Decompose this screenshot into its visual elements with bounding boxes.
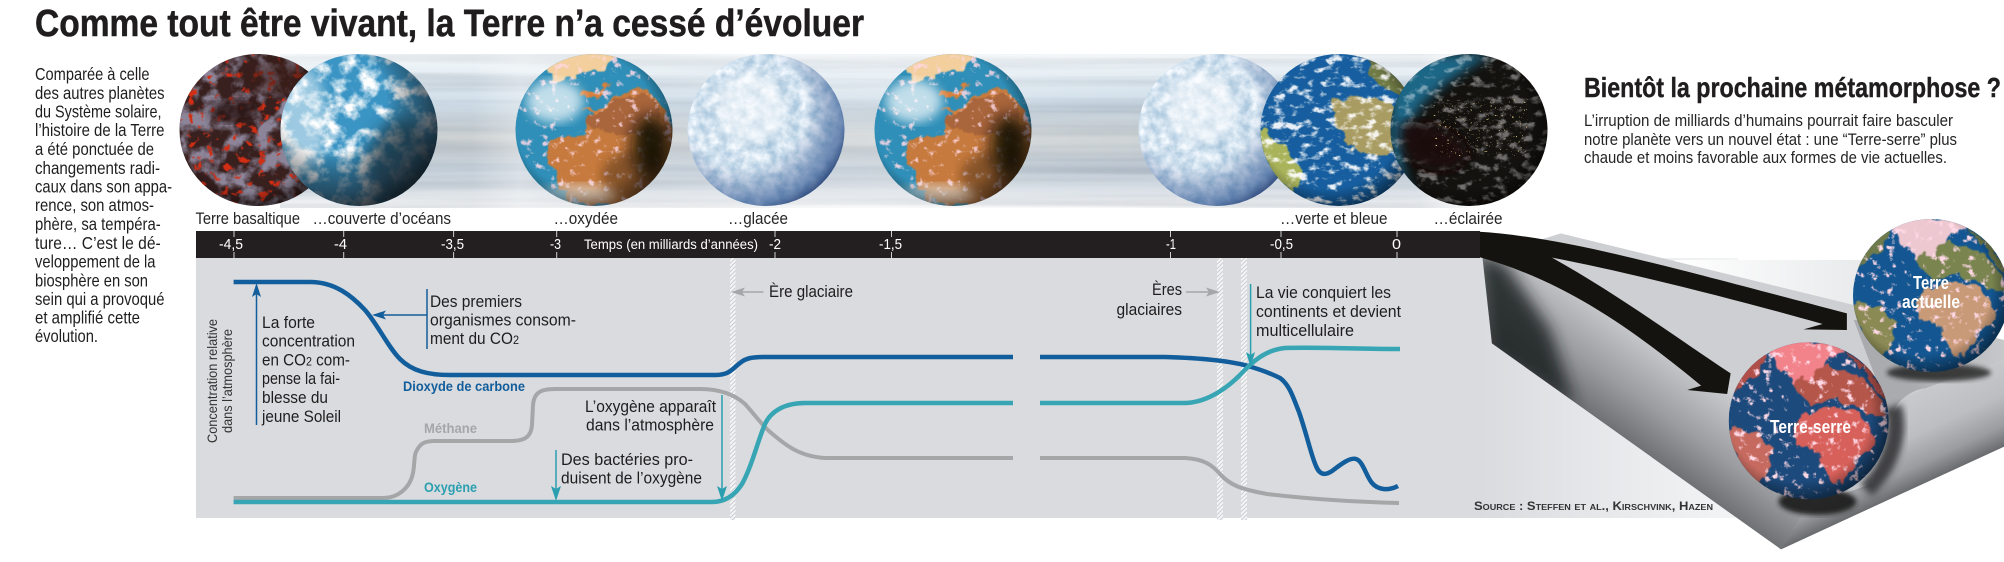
arrows: two possible trajectories [1477,232,1847,394]
title: Comme tout être vivant, la Terre n’a cessé d’évoluer [35,3,864,45]
annotation: Ères glaciaires with arrow: glaciaires [1116,300,1182,319]
y axis label [204,319,235,443]
axis tick labels: -0,5 [1270,236,1293,253]
label: Terre actuelle [1902,273,1960,312]
glacial period stripes [730,258,1247,520]
source note: Source : Steffen et al., Kirschvink, Hazen [1474,501,1713,513]
label: glacée: …glacée [728,209,788,228]
panel: blurred planet band [280,54,1480,208]
text block: introduction [35,64,172,346]
label: éclairée: …éclairée [1434,209,1502,228]
label: Dioxyde de carbone: Dioxyde de carbone [403,379,525,394]
annotation: young Sun with arrow: jeune Soleil [261,407,341,426]
text block: next metamorphosis: chaude et moins favorable aux formes de vie actuelles. [1584,148,1947,167]
panel: pale backdrop behind the stability diagram [1675,260,1885,330]
text block: introduction: des autres planètes [35,83,165,103]
y axis label: Concentration relative [204,319,220,443]
annotation: bacteria with arrow: Des bactéries pro- [561,450,693,469]
icon: planet frozen [688,54,844,206]
label: Oxygène: Oxygène [424,480,477,495]
icon: planet basaltic Earth [180,54,308,206]
text block: introduction: du Système solaire, [35,102,162,122]
label: Méthane: Méthane [424,421,477,436]
annotation: Ères glaciaires with arrow: Ères [1152,280,1182,299]
annotation: Ère glaciaire with arrow: Ère glaciaire [769,282,853,301]
annotation: multicellular life with arrow: continents et devient [1256,302,1401,321]
icon: planet covered with oceans [279,54,438,210]
panel: chart background extension [1480,258,1738,518]
icon: planet oxidized [516,50,676,206]
annotation: oxygen appears with arrow [585,395,727,501]
annotation: young Sun with arrow: pense la fai- [262,369,340,388]
label: Terre actuelle: actuelle [1902,292,1960,312]
text block: introduction: Comparée à celle [35,64,150,84]
icon: planet oxidized second phase [874,50,1035,206]
annotation: first organisms with arrow: ment du CO2 [430,329,519,348]
annotation: oxygen appears with arrow: L’oxygène apparaît [585,397,716,416]
icon: planet frozen second phase [1138,54,1278,206]
icon: planet lit by cities [1390,54,1548,206]
annotation: first organisms with arrow: organismes consom- [430,310,576,330]
text block: introduction: veloppement de la [35,252,156,272]
annotation: young Sun with arrow: en CO2 com- [262,350,350,370]
axis tick labels: -1,5 [879,236,902,253]
time axis bar [196,231,1480,258]
axis tick labels: -2 [769,236,781,253]
axis tick labels: -1 [1166,236,1176,253]
annotation: young Sun with arrow: La forte [262,313,315,332]
label: Terre-serre: Terre-serre [1770,417,1851,437]
text block: next metamorphosis: notre planète vers un nouvel état : une “Terre-serre” plus [1584,130,1957,149]
text block: introduction: sein qui a provoqué [35,289,164,309]
text block: introduction: l’histoire de la Terre [35,120,164,140]
annotation: first organisms with arrow: Des premiers [430,292,522,311]
annotation: Ères glaciaires with arrow [1116,280,1220,319]
annotation: multicellular life with arrow [1246,283,1401,367]
text block: next metamorphosis: L’irruption de milliards d’humains pourrait faire basculer [1584,111,1953,130]
annotation: young Sun with arrow [252,283,355,426]
line chart: carbon dioxide [234,282,1398,489]
axis tick labels: -4 [334,236,347,253]
panel: chart background [196,258,1480,518]
y axis label: dans l’atmosphère [219,329,235,433]
icon: planet green and blue [1260,54,1404,206]
annotation: young Sun with arrow: concentration [262,332,355,350]
annotation: multicellular life with arrow: multicellulaire [1256,321,1354,340]
icon: globe Terre actuelle [1853,217,2004,372]
label: Terre basaltique: Terre basaltique [196,209,300,228]
label: oxydée: …oxydée [554,209,618,228]
text block: introduction: a été ponctuée de [35,139,154,159]
text block: introduction: phère, sa tempéra- [35,214,161,234]
axis tick labels: -4,5 [219,236,243,253]
axis title: Temps (en milliards d’années) [584,237,758,252]
text block: introduction: caux dans son appa- [35,176,172,196]
icon: globe Terre-serre [1729,340,1889,499]
label: couverte d'océans: …couverte d’océans [312,209,451,228]
label: Terre actuelle: Terre [1913,273,1949,293]
annotation: first organisms with arrow [372,289,576,349]
annotation: bacteria with arrow [551,450,702,501]
text block: introduction: rence, son atmos- [35,195,154,215]
line chart: methane [234,389,1399,503]
diagram: stability landscape [1477,232,2004,549]
text block: introduction: et amplifié cette [35,308,140,328]
line chart: oxygen [234,348,1400,502]
text block: introduction: biosphère en son [35,270,148,290]
text block: introduction: changements radi- [35,158,160,178]
axis tick labels: -3,5 [441,236,464,253]
text block: introduction: ture… C’est le dé- [35,233,161,253]
annotation: young Sun with arrow: blesse du [262,388,328,407]
annotation: Ère glaciaire with arrow [731,282,853,301]
axis tick labels [219,236,1401,253]
annotation: multicellular life with arrow: La vie conquiert les [1256,283,1391,302]
text block: introduction: évolution. [35,326,98,346]
annotation: oxygen appears with arrow: dans l’atmosphère [586,416,714,434]
axis tick labels: 0 [1392,236,1401,253]
label: verte et bleue: …verte et bleue [1280,209,1388,228]
annotation: bacteria with arrow: duisent de l’oxygène [561,468,702,488]
axis tick labels: -3 [550,236,561,253]
text block: next metamorphosis [1584,111,1957,167]
